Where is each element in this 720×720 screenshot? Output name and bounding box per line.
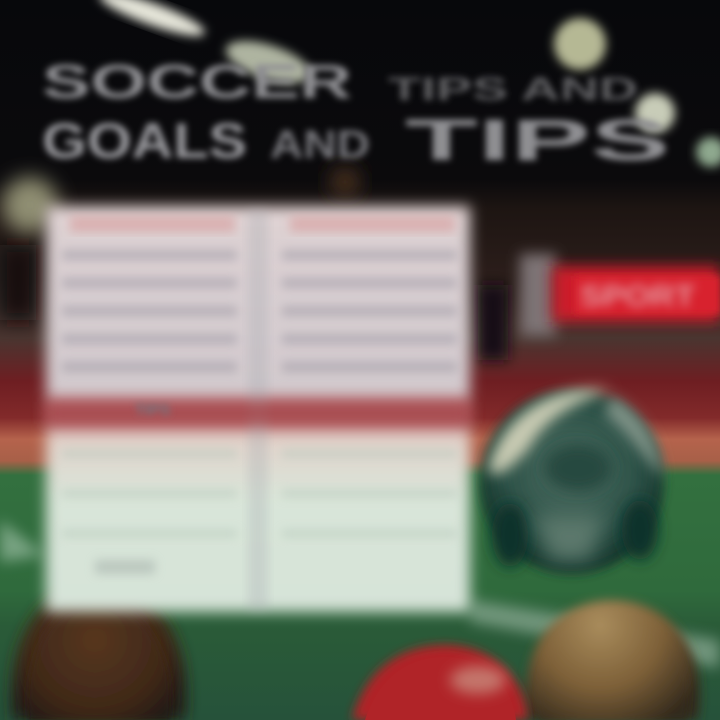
panel lower rows <box>62 450 457 574</box>
sign: red banner <box>520 254 720 336</box>
panel header bands <box>70 216 455 232</box>
panel red band <box>46 402 470 424</box>
decorative lights <box>2 0 720 233</box>
icon: brown ball <box>11 585 187 720</box>
icon: soccer ball <box>480 389 664 574</box>
title <box>42 56 670 173</box>
sign: red banner: SPORT <box>580 280 695 313</box>
icon: gold ball <box>526 600 700 720</box>
title: TIPS AND <box>388 71 638 107</box>
panel upper rows <box>62 250 457 372</box>
title: AND <box>270 123 370 167</box>
column divider <box>248 210 268 610</box>
panel band label: TIPS <box>135 402 171 419</box>
icon: red ball <box>352 645 528 720</box>
title: SOCCER <box>42 56 352 109</box>
panel: table sheet <box>46 206 470 612</box>
title: TIPS <box>405 108 670 173</box>
title: GOALS <box>42 113 247 169</box>
